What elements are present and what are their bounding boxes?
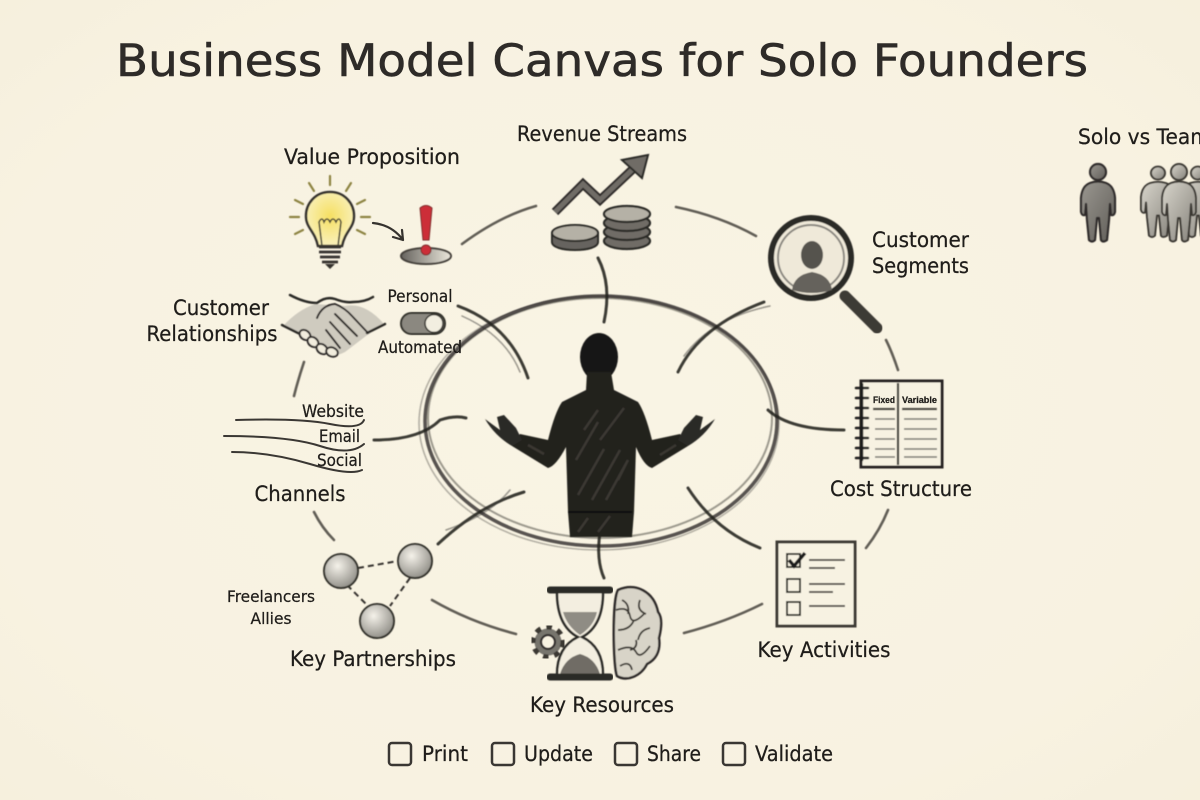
heading: customer segments: Customer — [872, 228, 969, 252]
text: fixed and variable: Variable — [902, 395, 937, 406]
node: key partnerships — [227, 544, 456, 671]
inward connector strokes — [374, 258, 844, 578]
text: freelancers and allies: Allies — [250, 609, 292, 628]
text: automated: Automated — [378, 338, 462, 357]
node: revenue streams — [517, 122, 687, 250]
icon: exclamation mark — [401, 206, 451, 264]
icon: brain — [614, 587, 661, 678]
item: print — [389, 742, 468, 766]
head — [580, 333, 618, 381]
text: freelancers and allies — [227, 587, 315, 628]
icon: team of people — [1141, 164, 1200, 242]
node: key activities — [758, 542, 890, 662]
text: personal: Personal — [388, 287, 452, 306]
heading: customer relationships: Customer — [173, 296, 269, 320]
node: customer segments: Segments — [872, 254, 969, 278]
body and arms — [512, 372, 688, 537]
icon: light bulb — [290, 176, 370, 269]
channel lines — [224, 420, 364, 472]
icon: checklist — [777, 542, 855, 626]
item: validate: Validate — [755, 742, 833, 766]
icon: toggle switch — [401, 313, 445, 334]
icon: ledger notebook — [856, 381, 942, 467]
text: freelancers and allies: Freelancers — [227, 587, 315, 606]
text: channel labels — [302, 402, 364, 470]
node: customer relationships: Relationships — [146, 322, 278, 346]
icon: gear — [533, 627, 563, 657]
title: Business Model Canvas for Solo Founders — [116, 36, 1088, 87]
node: value proposition — [284, 145, 460, 269]
checklist footer — [389, 742, 833, 766]
icon: network of three nodes — [324, 544, 432, 638]
left hand — [485, 415, 522, 446]
text: channel labels: Email — [319, 427, 360, 446]
item: print: Print — [422, 742, 468, 766]
heading: revenue streams: Revenue Streams — [517, 122, 687, 146]
right hand — [678, 415, 715, 446]
text: channel labels: Social — [317, 451, 362, 470]
text: fixed and variable: Fixed — [873, 395, 895, 406]
item: validate — [723, 742, 833, 766]
icon: growth arrow and coins — [552, 155, 650, 250]
arrow: bulb to exclamation — [373, 223, 403, 240]
heading: key partnerships: Key Partnerships — [290, 647, 456, 671]
panel: solo vs team — [1078, 125, 1200, 242]
heading: key resources: Key Resources — [530, 693, 674, 717]
item: update: Update — [524, 742, 593, 766]
central ellipse ring — [419, 296, 779, 550]
node: customer relationships — [146, 287, 462, 358]
item: share — [615, 742, 701, 766]
heading: key activities: Key Activities — [758, 638, 890, 662]
node: channels — [224, 402, 364, 506]
central silhouette founder — [485, 333, 715, 537]
item: share: Share — [647, 742, 701, 766]
heading: channels: Channels — [254, 482, 346, 506]
node: customer segments — [771, 218, 969, 328]
item: update — [492, 742, 593, 766]
icon: handshake — [282, 295, 385, 358]
node: key resources — [530, 587, 674, 717]
icon: magnifying glass with person — [771, 218, 877, 328]
outer ring connector arcs — [294, 206, 898, 634]
heading: value proposition: Value Proposition — [284, 145, 460, 169]
heading: cost structure: Cost Structure — [830, 477, 972, 501]
icon: solo person — [1081, 164, 1115, 242]
text: fixed and variable — [873, 395, 937, 406]
icon: hourglass — [550, 590, 610, 677]
node: cost structure — [830, 381, 972, 501]
shading hatch on torso — [528, 408, 676, 532]
text: channel labels: Website — [302, 402, 364, 421]
